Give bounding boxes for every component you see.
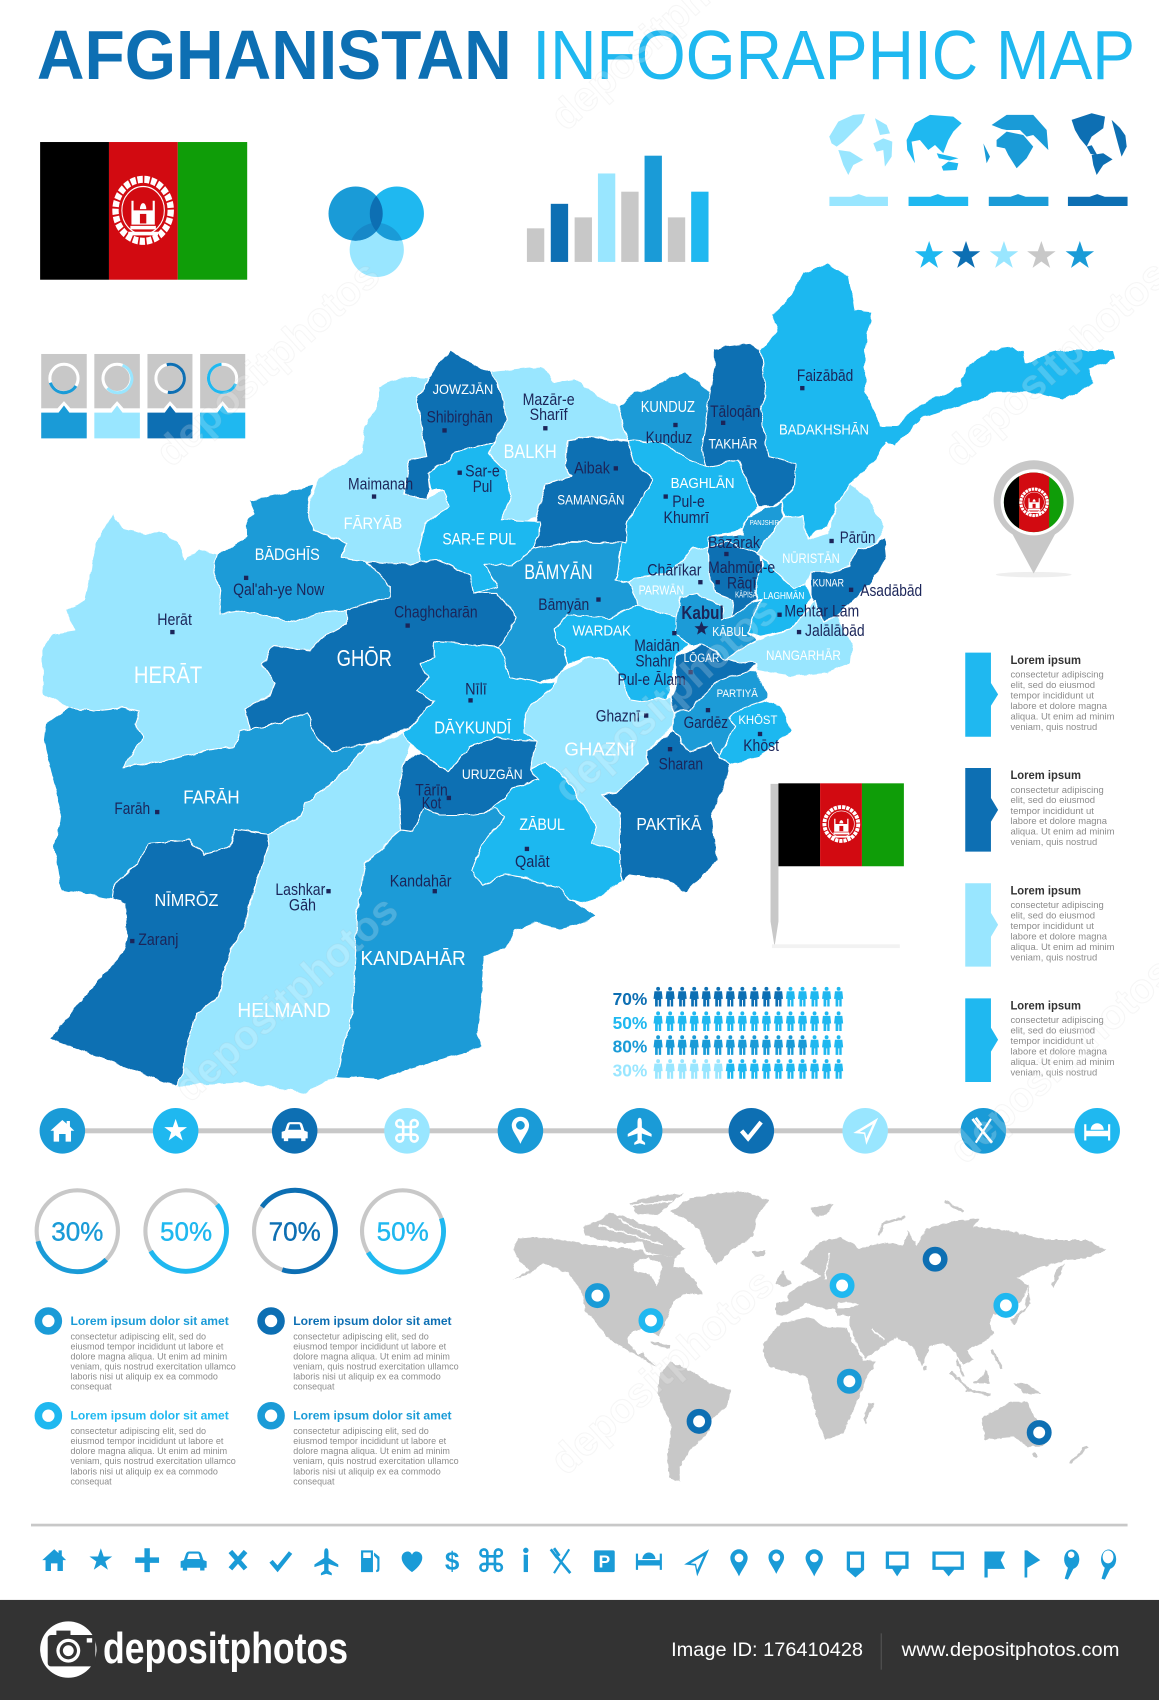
- map labels: cities: Maidān: [634, 637, 680, 655]
- province: Balkh: [488, 366, 628, 521]
- text block 4: consectetur adipiscing elit, sed do: [293, 1426, 429, 1436]
- map of Afghanistan provinces: [42, 263, 1116, 1093]
- province: Logar: [672, 645, 756, 712]
- map labels: province names: URUZGĀN: [462, 766, 523, 782]
- Madagascar: [863, 1403, 875, 1423]
- donut 50% second: 50%: [377, 1216, 429, 1246]
- legend item 3: labore et dolore magna: [1010, 931, 1108, 941]
- map labels: province names: KANDAHĀR: [360, 947, 466, 970]
- globe 2: [907, 115, 962, 171]
- text block 2: Lorem ipsum dolor sit amet: [293, 1314, 452, 1328]
- legend item 4: aliqua. Ut enim ad minim: [1010, 1057, 1115, 1067]
- map labels: cities: Maimanah: [348, 476, 413, 494]
- legend item 3: elit, sed do eiusmod: [1010, 910, 1095, 920]
- icon: check: [729, 1108, 774, 1154]
- text block 4: dolore magna aliqua. Ut enim ad minim: [293, 1446, 450, 1456]
- Africa: [763, 1317, 877, 1440]
- logo: wordmark: depositphotos: [103, 1625, 348, 1673]
- Eurasia: [776, 1218, 1107, 1367]
- map labels: province names: LŌGAR: [684, 651, 720, 665]
- map labels: cities: Kabul: [681, 602, 724, 623]
- map labels: cities: Farāh: [114, 800, 150, 818]
- logo: camera mark: [40, 1621, 96, 1678]
- text block 2: consequat: [293, 1382, 335, 1392]
- text block 1: consectetur adipiscing elit, sed do: [70, 1331, 206, 1341]
- province: Faryab: [306, 377, 450, 565]
- legend item 4: consectetur adipiscing: [1010, 1015, 1104, 1025]
- donut 30%: 30%: [51, 1216, 103, 1246]
- text block 1: laboris nisi ut aliquip ex ea commodo: [70, 1372, 218, 1382]
- text block 4: [261, 1406, 459, 1486]
- New Guinea: [1013, 1383, 1040, 1393]
- map labels: cities: Mahmūd-e: [708, 559, 775, 577]
- UK: [775, 1270, 792, 1287]
- icon: star: [153, 1108, 198, 1154]
- province: Wardak: [555, 605, 689, 701]
- legend item 2: labore et dolore magna: [1010, 816, 1108, 826]
- watermarks: depositphotos: [147, 251, 388, 475]
- icon legend row: [42, 1546, 1116, 1580]
- continent: North America: [513, 1237, 703, 1367]
- map labels: cities: Aibak: [574, 459, 611, 477]
- map labels: province names: PAKTĪKĀ: [636, 814, 702, 834]
- map labels: province names: KUNDUZ: [641, 399, 695, 416]
- map labels: cities: Pārūn: [840, 529, 875, 547]
- map labels: cities: Pul-e: [672, 493, 705, 511]
- side legend panels: [965, 653, 1115, 1082]
- province: Ghazni: [525, 657, 673, 852]
- Black Sea: [837, 1302, 860, 1308]
- map labels: province names: PANJSHIR: [750, 520, 779, 527]
- text block 3: dolore magna aliqua. Ut enim ad minim: [70, 1446, 227, 1456]
- map labels: cities: Ghaznī: [596, 708, 641, 726]
- province: Herat: [42, 513, 346, 768]
- legend item 1: veniam, quis nostrud: [1010, 722, 1097, 732]
- map labels: cities: Herāt: [157, 611, 192, 629]
- text block 1: Lorem ipsum dolor sit amet: [70, 1314, 229, 1328]
- tile 2: [94, 354, 140, 438]
- Japan: [1010, 1283, 1030, 1325]
- map labels: province names: NŪRISTĀN: [782, 551, 840, 566]
- percentage donut charts: [37, 1190, 443, 1272]
- map labels: province names: BAGHLĀN: [671, 475, 735, 492]
- globe 1: [829, 114, 892, 175]
- map labels: province names: BALKH: [504, 441, 557, 463]
- text block 4: laboris nisi ut aliquip ex ea commodo: [293, 1466, 441, 1476]
- map labels: cities: Bāmyān: [538, 596, 589, 614]
- legend item 4: [965, 998, 1115, 1082]
- legend item 2: tempor incididunt ut: [1010, 806, 1094, 816]
- province: Kunar: [811, 537, 887, 622]
- flag on pole: [771, 783, 904, 948]
- map labels: cities: Khumrī: [664, 509, 709, 527]
- map labels: cities: Jalālābād: [805, 622, 865, 640]
- text block 3: consequat: [70, 1476, 112, 1486]
- province: Paktiya: [673, 670, 768, 757]
- legend item 4: tempor incididunt ut: [1010, 1036, 1094, 1046]
- province: Panjshir: [708, 502, 784, 553]
- icon legend row: $: [445, 1546, 460, 1576]
- map labels: province names: FĀRYĀB: [344, 514, 402, 533]
- website: www.depositphotos.com: [901, 1639, 1120, 1661]
- province: Parwan: [628, 546, 733, 620]
- map labels: cities: Chārīkar: [647, 561, 702, 579]
- map labels: cities: Lashkar: [275, 881, 326, 899]
- map labels: province names: SAMANGĀN: [557, 492, 624, 507]
- map labels: cities: Qal'ah-ye Now: [233, 581, 324, 599]
- watermarks: depositphotos: [544, 587, 786, 811]
- map labels: cities: Tāloqān: [710, 403, 760, 421]
- text block 1: veniam, quis nostrud exercitation ullamco: [70, 1361, 236, 1371]
- 50% row: 50%: [613, 1013, 647, 1033]
- image id: Image ID: 176410428: [671, 1639, 863, 1661]
- South America: [658, 1362, 732, 1482]
- donut 50%: [145, 1190, 227, 1272]
- map labels: cities: Shibirghān: [427, 408, 493, 426]
- Greenland: [670, 1192, 768, 1265]
- 70% row: [613, 987, 843, 1009]
- star rating: [915, 241, 1094, 268]
- map labels: cities: Bāzārak: [708, 534, 761, 552]
- watermarks: depositphotos: [541, 1259, 783, 1483]
- legend item 4: elit, sed do eiusmod: [1010, 1025, 1095, 1035]
- province: Ghor: [245, 560, 517, 751]
- map labels: province names: KHŌST: [738, 713, 777, 727]
- map labels: cities: Mazār-e: [523, 391, 575, 409]
- map labels: province names: JOWZJĀN: [433, 381, 493, 397]
- watermarks: [147, 0, 1159, 1483]
- Hudson Bay: [633, 1258, 661, 1287]
- map labels: cities: Pul: [473, 478, 492, 496]
- donut 70%: [254, 1190, 335, 1272]
- footer bar: [0, 1600, 1159, 1700]
- venn diagram: [329, 186, 424, 277]
- donut 70%: 70%: [269, 1216, 321, 1246]
- map labels: province names: HELMAND: [237, 999, 331, 1022]
- map labels: cities: Kandahār: [390, 872, 452, 890]
- map labels: province names: HERĀT: [134, 662, 203, 689]
- map labels: cities: Tārīn: [415, 781, 448, 799]
- map labels: province names: PARWĀN: [639, 582, 684, 597]
- legend item 3: Lorem ipsum: [1010, 883, 1081, 897]
- map labels: province names: ZĀBUL: [519, 816, 565, 834]
- map labels: province names: KĀPISĀ: [735, 590, 757, 600]
- map city markers: [130, 386, 853, 943]
- icon: bed: [1074, 1108, 1120, 1154]
- province: Zabul: [472, 762, 621, 903]
- legend item 3: [965, 883, 1115, 967]
- icon: cutlery: [961, 1108, 1006, 1154]
- icon legend row: P: [599, 1552, 610, 1572]
- 50% row: [613, 1011, 843, 1033]
- map labels: cities: Sharan: [659, 755, 703, 773]
- province: Takhar: [702, 343, 796, 507]
- legend item 2: [965, 768, 1115, 852]
- Sri Lanka: [923, 1366, 927, 1370]
- legend item 1: Lorem ipsum: [1010, 653, 1081, 667]
- province: Kunduz: [618, 372, 710, 467]
- map labels: cities: Faizābād: [797, 367, 853, 385]
- legend item 3: tempor incididunt ut: [1010, 921, 1094, 931]
- province: Badakhshan: [761, 263, 1116, 540]
- legend item 1: elit, sed do eiusmod: [1010, 680, 1095, 690]
- text blocks: [38, 1311, 459, 1486]
- world map: [513, 1192, 1107, 1482]
- legend item 2: Lorem ipsum: [1010, 768, 1081, 782]
- legend item 3: consectetur adipiscing: [1010, 900, 1104, 910]
- map labels: cities: Rāqī: [727, 574, 757, 592]
- icon: command: [384, 1108, 430, 1154]
- sea and strait lines: [848, 1330, 863, 1358]
- province: Khost: [719, 700, 791, 765]
- divider: [31, 1524, 1128, 1526]
- Australia: [982, 1402, 1052, 1447]
- province: Baghlan: [616, 440, 758, 583]
- Canadian Arctic: [583, 1213, 685, 1258]
- legend item 1: [965, 653, 1115, 737]
- legend item 1: tempor incididunt ut: [1010, 691, 1094, 701]
- province: Jowzjan: [404, 350, 507, 498]
- province: Farah: [43, 707, 368, 899]
- 30% row: 30%: [613, 1061, 647, 1081]
- map labels: cities: Nīlī: [465, 681, 487, 699]
- 80% row: [613, 1035, 843, 1057]
- map labels: province names: FARĀH: [183, 786, 240, 807]
- map labels: province names: [134, 381, 869, 1022]
- legend item 2: aliqua. Ut enim ad minim: [1010, 827, 1115, 837]
- map labels: province names: BĀDGHĪS: [255, 546, 320, 564]
- map labels: cities: Gāh: [289, 896, 316, 914]
- province: Nuristan: [756, 484, 885, 588]
- map labels: cities: Gardēz: [684, 714, 728, 732]
- icon: home: [40, 1108, 85, 1154]
- map labels: province names: SAR-E PUL: [442, 529, 516, 548]
- Tasmania: [1032, 1452, 1038, 1458]
- text block 2: dolore magna aliqua. Ut enim ad minim: [293, 1351, 450, 1361]
- province: Paktika: [602, 730, 730, 893]
- map labels: cities: Sharīf: [530, 406, 568, 424]
- legend item 3: aliqua. Ut enim ad minim: [1010, 942, 1115, 952]
- province: Helmand: [176, 733, 411, 1093]
- map labels: cities: Pul-e Ālam: [617, 671, 686, 689]
- text block 2: consectetur adipiscing elit, sed do: [293, 1331, 429, 1341]
- icon: car: [272, 1108, 317, 1154]
- map labels: cities: Sar-e: [465, 463, 500, 481]
- province: Nimroz: [48, 829, 269, 1086]
- province: Kandahar: [337, 807, 597, 1080]
- map location pins: [588, 1250, 1048, 1442]
- text block 2: [261, 1311, 459, 1392]
- province: Laghman: [748, 557, 811, 636]
- text block 1: eiusmod tempor incididunt ut labore et: [70, 1341, 224, 1351]
- text block 3: Lorem ipsum dolor sit amet: [70, 1409, 229, 1423]
- tile 3: [147, 354, 192, 438]
- province: Sar-e Pul: [419, 442, 540, 593]
- text block 3: veniam, quis nostrud exercitation ullamco: [70, 1456, 236, 1466]
- map labels: province names: GHAZNĪ: [564, 739, 636, 760]
- legend item 2: veniam, quis nostrud: [1010, 837, 1097, 847]
- map labels: province names: KĀBUL: [712, 625, 747, 639]
- map labels: cities: Shahr: [635, 652, 673, 670]
- title: AFGHANISTAN: [37, 16, 512, 94]
- province: Kapisa: [708, 542, 763, 617]
- Svalbard: [810, 1203, 833, 1217]
- text block 1: consequat: [70, 1382, 112, 1392]
- legend item 1: labore et dolore magna: [1010, 701, 1108, 711]
- province: Kabul: [677, 593, 761, 660]
- icon: navigation arrow: [842, 1108, 888, 1154]
- text block 2: laboris nisi ut aliquip ex ea commodo: [293, 1372, 441, 1382]
- globe 4: [1072, 113, 1127, 175]
- province: Samangan: [531, 437, 653, 550]
- icon: pin: [498, 1108, 543, 1154]
- map labels: province names: KUNAR: [813, 577, 844, 589]
- legend item 4: Lorem ipsum: [1010, 998, 1081, 1012]
- legend item 4: veniam, quis nostrud: [1010, 1067, 1097, 1077]
- globes: [829, 113, 1127, 175]
- donut 50% second: [362, 1190, 443, 1272]
- title: [37, 16, 1135, 94]
- text block 2: veniam, quis nostrud exercitation ullamco: [293, 1361, 459, 1371]
- globe caption bars: [829, 194, 1128, 206]
- map labels: province names: BĀMYĀN: [524, 559, 593, 584]
- donut 30%: [37, 1190, 118, 1272]
- province: Daykundi: [403, 642, 557, 772]
- map labels: province names: LAGHMĀN: [763, 590, 804, 602]
- map labels: cities: Zaranj: [138, 931, 178, 949]
- legend item 1: aliqua. Ut enim ad minim: [1010, 711, 1115, 721]
- text block 4: veniam, quis nostrud exercitation ullamco: [293, 1456, 459, 1466]
- province: Badghis: [213, 485, 390, 622]
- text block 1: [38, 1311, 236, 1392]
- map labels: province names: TAKHĀR: [709, 435, 757, 451]
- tile 4: [200, 354, 245, 438]
- map labels: cities: Asadābād: [860, 582, 922, 600]
- 70% row: 70%: [613, 989, 647, 1009]
- province: Uruzgan: [398, 738, 538, 832]
- map labels: cities: Mehtar Lām: [784, 602, 859, 620]
- map labels: province names: NĪMRŌZ: [154, 890, 219, 910]
- map labels: province names: GHŌR: [337, 645, 392, 671]
- Iceland: [752, 1250, 767, 1257]
- 80% row: 80%: [613, 1037, 647, 1057]
- map labels: cities: Qalāt: [515, 853, 550, 871]
- text block 3: consectetur adipiscing elit, sed do: [70, 1426, 206, 1436]
- legend item 2: elit, sed do eiusmod: [1010, 795, 1095, 805]
- map labels: province names: BADAKHSHĀN: [779, 422, 869, 438]
- text block 4: consequat: [293, 1476, 335, 1486]
- text block 4: eiusmod tempor incididunt ut labore et: [293, 1436, 447, 1446]
- map labels: province names: DĀYKUNDĪ: [434, 717, 511, 737]
- Kamchatka: [1052, 1263, 1065, 1288]
- map labels: province names: NANGARHĀR: [766, 647, 841, 663]
- map labels: cities: Kot: [422, 794, 442, 812]
- thin islands: [878, 1217, 905, 1235]
- text block 1: dolore magna aliqua. Ut enim ad minim: [70, 1351, 227, 1361]
- map labels: province names: PARTIYĀ: [717, 688, 758, 700]
- location pin with flag: [994, 460, 1074, 577]
- text block 4: Lorem ipsum dolor sit amet: [293, 1409, 452, 1423]
- progress tiles: [41, 354, 245, 438]
- map labels: cities: Khōst: [743, 737, 779, 755]
- 30% row: [613, 1059, 843, 1081]
- legend item 4: labore et dolore magna: [1010, 1046, 1108, 1056]
- legend item 1: consectetur adipiscing: [1010, 670, 1104, 680]
- people pictogram chart: [613, 987, 843, 1081]
- donut 50%: 50%: [160, 1216, 212, 1246]
- globe 3: [983, 115, 1048, 168]
- icon: plane: [617, 1108, 662, 1154]
- watermarks: depositphotos: [165, 886, 407, 1110]
- icon timeline: [40, 1108, 1120, 1154]
- map labels: cities: Kunduz: [646, 429, 692, 447]
- Borneo: [973, 1370, 990, 1383]
- text block 2: eiusmod tempor incididunt ut labore et: [293, 1341, 447, 1351]
- bar chart: [527, 156, 709, 262]
- legend item 3: veniam, quis nostrud: [1010, 952, 1097, 962]
- map labels: province names: WARDAK: [572, 622, 631, 639]
- map labels: cities: Chaghcharān: [394, 604, 478, 622]
- text block 3: laboris nisi ut aliquip ex ea commodo: [70, 1466, 218, 1476]
- text block 3: eiusmod tempor incididunt ut labore et: [70, 1436, 224, 1446]
- legend item 2: consectetur adipiscing: [1010, 785, 1104, 795]
- flag of Afghanistan: [40, 142, 247, 280]
- tile 1: [41, 354, 87, 438]
- text block 3: [38, 1406, 236, 1486]
- map labels: cities: [114, 367, 922, 949]
- province: Bamyan: [475, 542, 639, 683]
- province: Nangarhar: [725, 600, 853, 677]
